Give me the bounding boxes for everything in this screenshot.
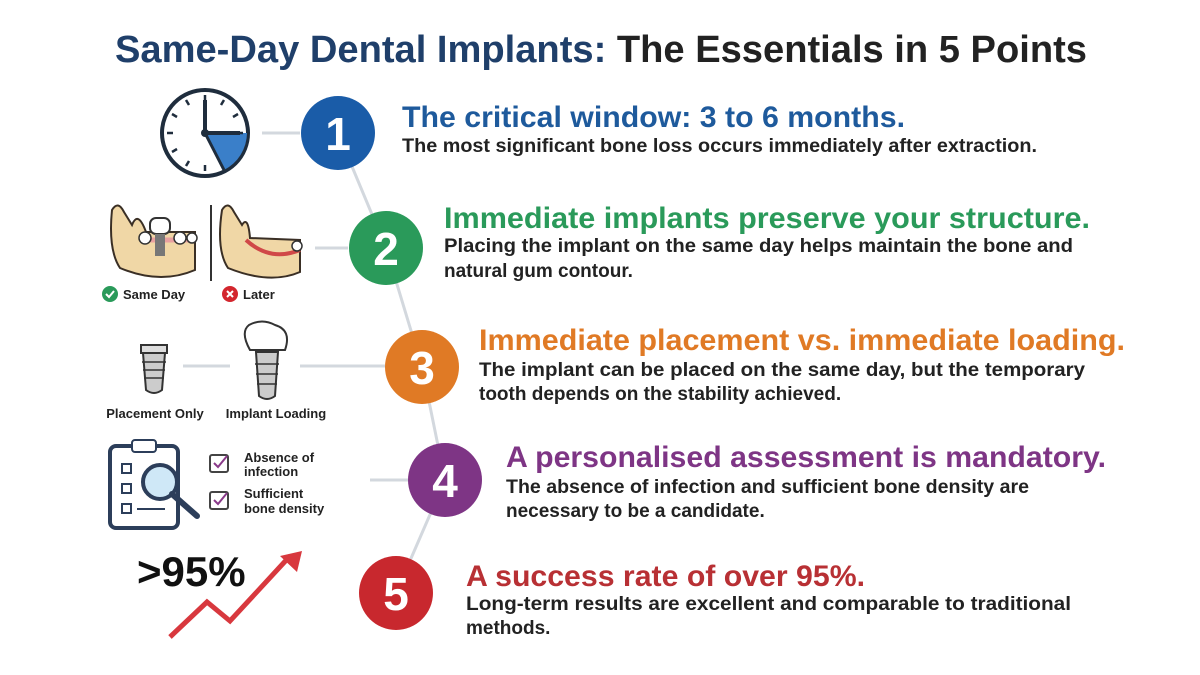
point 1: 1 — [325, 108, 351, 160]
icon: jaw comparison: Later — [243, 287, 275, 302]
point 2: 2 — [373, 223, 399, 275]
icon: clipboard with magnifier: Sufficient — [244, 486, 304, 501]
point 3: The implant can be placed on the same day, but the temporary — [479, 360, 1085, 381]
icon: clipboard with magnifier — [110, 440, 325, 528]
labels: same day / later — [102, 286, 118, 302]
point 5: 5 — [383, 568, 409, 620]
point 2: Immediate implants preserve your structure. — [444, 202, 1090, 235]
point 4: 4 — [432, 455, 458, 507]
icon: jaw comparison — [102, 205, 302, 302]
point 5 — [359, 556, 1071, 639]
icon: implants — [106, 322, 326, 421]
icon: clipboard with magnifier: infection — [244, 464, 298, 479]
point 1: The critical window: 3 to 6 months. — [402, 101, 905, 134]
point 5: methods. — [466, 618, 550, 639]
icon: jaw comparison: Same Day — [123, 287, 186, 302]
icon: clipboard with magnifier: bone density — [244, 501, 325, 516]
point 4 — [408, 441, 1106, 522]
point 4: A personalised assessment is mandatory. — [506, 441, 1106, 474]
point 2: natural gum contour. — [444, 261, 633, 282]
point 5: Long-term results are excellent and comparable to traditional — [466, 594, 1071, 615]
point 3 — [385, 324, 1125, 405]
title: Same-Day Dental Implants: The Essentials in 5 Points — [115, 29, 1087, 71]
point 2 — [349, 202, 1090, 285]
point 1 — [301, 96, 1037, 170]
success stat with arrow — [137, 548, 302, 637]
point 5: A success rate of over 95%. — [466, 560, 865, 593]
success stat with arrow: >95% — [137, 548, 246, 595]
icon: implants: Placement Only — [106, 406, 205, 421]
point 3: 3 — [409, 342, 435, 394]
icon: clipboard with magnifier: Absence of — [244, 450, 315, 465]
checklist — [210, 455, 228, 472]
point 4: The absence of infection and sufficient bone density are — [506, 477, 1029, 498]
timeline connector — [183, 133, 445, 593]
point 2: Placing the implant on the same day helps maintain the bone and — [444, 236, 1073, 257]
point 3: tooth depends on the stability achieved. — [479, 384, 841, 405]
icon: implants: Implant Loading — [226, 406, 326, 421]
icon: clock — [162, 90, 248, 176]
point 3: Immediate placement vs. immediate loading. — [479, 324, 1125, 357]
point 1: The most significant bone loss occurs immediately after extraction. — [402, 136, 1037, 157]
point 4: necessary to be a candidate. — [506, 501, 765, 522]
